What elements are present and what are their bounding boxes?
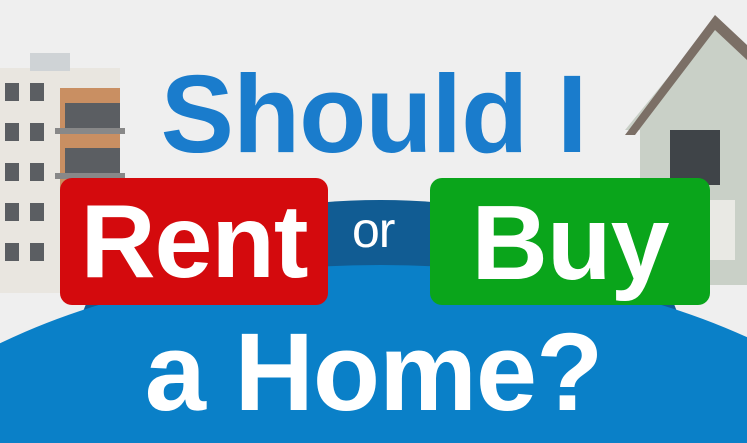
- illustration: house: [625, 15, 747, 285]
- subtitle: a Home?: a Home?: [145, 311, 602, 434]
- text: or: or: [352, 202, 394, 258]
- text: Buy: Buy: [471, 184, 669, 302]
- title: Should I: Should I: [161, 53, 586, 176]
- illustration: apartment building: [0, 53, 125, 293]
- text: Rent: Rent: [80, 184, 308, 300]
- red box: Rent: [60, 178, 328, 305]
- green box: Buy: [430, 178, 710, 305]
